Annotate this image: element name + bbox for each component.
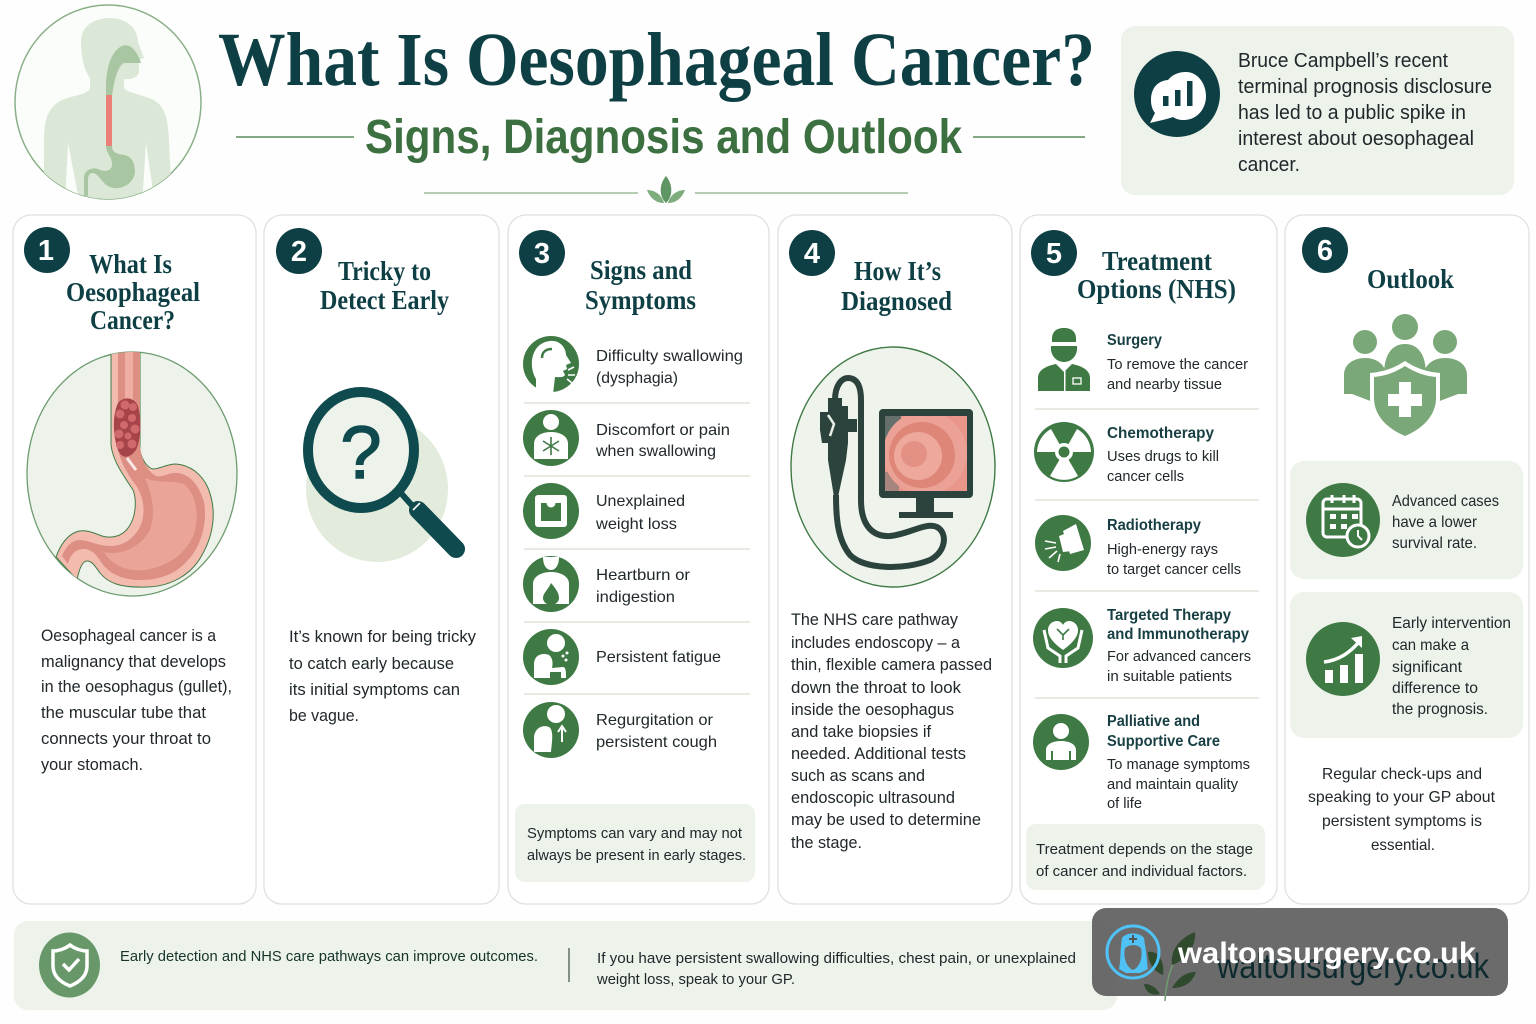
text: regular check-ups: Regular check-ups and bbox=[1322, 766, 1482, 783]
text: regular check-ups: essential. bbox=[1371, 837, 1435, 854]
footer message: Early detection and NHS care pathways can improve outcomes. bbox=[120, 948, 538, 965]
panel 4: how it's diagnosed bbox=[778, 215, 1012, 904]
treatment: surgery: To remove the cancer bbox=[1107, 356, 1248, 373]
heading 6: Outlook bbox=[1367, 264, 1454, 294]
note: treatment depends bbox=[1026, 824, 1265, 890]
icon: calendar bbox=[1306, 483, 1380, 557]
badge 5: 5 bbox=[1046, 238, 1062, 270]
note: treatment depends: Treatment depends on the stage bbox=[1036, 841, 1253, 858]
callout: advanced cases: survival rate. bbox=[1392, 535, 1477, 552]
treatment: surgery bbox=[1038, 328, 1248, 393]
treatment: surgery: Surgery bbox=[1107, 332, 1162, 349]
icon: leaf divider bbox=[424, 176, 908, 203]
treatment: chemotherapy: Chemotherapy bbox=[1107, 425, 1214, 442]
treatment: palliative care: and maintain quality bbox=[1107, 776, 1238, 793]
illustration: endoscope and monitor bbox=[791, 347, 995, 587]
heading 3: Symptoms bbox=[585, 285, 696, 315]
body text 4: includes endoscopy – a bbox=[791, 633, 961, 652]
body text 2 bbox=[289, 627, 476, 725]
badge 3: 3 bbox=[534, 238, 550, 270]
treatment: palliative care: Supportive Care bbox=[1107, 733, 1220, 750]
symptom: discomfort: Discomfort or pain bbox=[596, 422, 730, 439]
symptom: weight loss: weight loss bbox=[595, 516, 677, 533]
icon: chart speech bubble bbox=[1134, 51, 1220, 137]
heading 2: Detect Early bbox=[320, 285, 449, 315]
text: regular check-ups: persistent symptoms is bbox=[1322, 813, 1482, 830]
footer advice: weight loss, speak to your GP. bbox=[596, 971, 795, 988]
icon: magnifying glass bbox=[306, 392, 456, 562]
body text 4 bbox=[791, 610, 992, 852]
footer advice: If you have persistent swallowing difficulties, chest pain, or unexplained bbox=[597, 950, 1076, 967]
callout: advanced cases: have a lower bbox=[1392, 514, 1478, 531]
icon: anatomy medallion bbox=[15, 5, 201, 205]
symptom: fatigue bbox=[523, 629, 721, 685]
treatment: targeted therapy: and Immunotherapy bbox=[1107, 626, 1249, 643]
callout: early intervention: the prognosis. bbox=[1392, 701, 1488, 718]
badge 1 bbox=[24, 227, 70, 273]
heading 1: Oesophageal bbox=[66, 277, 200, 307]
heading 1 bbox=[66, 249, 200, 335]
note: symptoms vary: Symptoms can vary and may not bbox=[527, 825, 743, 842]
symptom: difficulty swallowing: (dysphagia) bbox=[596, 370, 678, 387]
symptom: heartburn bbox=[523, 556, 691, 612]
watermark url (white): waltonsurgery.co.uk bbox=[1177, 937, 1476, 970]
panel: context bbox=[1121, 26, 1514, 195]
body text 1: Oesophageal cancer is a bbox=[41, 626, 217, 645]
treatment: chemotherapy bbox=[1034, 422, 1219, 485]
body text 4: such as scans and bbox=[791, 766, 925, 785]
symptom: difficulty swallowing: Difficulty swallowing bbox=[596, 348, 743, 365]
subtitle: Signs, Diagnosis and Outlook bbox=[365, 111, 962, 164]
callout: early intervention: difference to bbox=[1392, 680, 1478, 697]
badge 4: 4 bbox=[804, 238, 820, 270]
callout: advanced cases: Advanced cases bbox=[1392, 493, 1499, 510]
callout: early intervention: significant bbox=[1392, 659, 1463, 676]
note: treatment depends: of cancer and individual factors. bbox=[1036, 863, 1247, 880]
body text 4: thin, flexible camera passed bbox=[791, 655, 992, 674]
treatment: palliative care: To manage symptoms bbox=[1107, 756, 1250, 773]
callout: early intervention bbox=[1290, 592, 1523, 738]
heading 4: How It’s bbox=[854, 256, 941, 286]
callout: early intervention: Early intervention bbox=[1392, 615, 1511, 632]
symptom: heartburn: indigestion bbox=[596, 589, 675, 606]
treatment: surgery: and nearby tissue bbox=[1107, 376, 1222, 393]
symptom: regurgitation: persistent cough bbox=[596, 734, 717, 751]
body text 1: connects your throat to bbox=[41, 729, 211, 748]
treatment: palliative care bbox=[1033, 713, 1250, 812]
badge 6 bbox=[1302, 227, 1348, 273]
icon: leaf sprig bbox=[1144, 932, 1196, 1001]
illustration: stomach bbox=[27, 352, 237, 596]
body text 4: inside the oesophagus bbox=[791, 700, 954, 719]
heading 1: What Is bbox=[89, 249, 172, 279]
watermark bbox=[1092, 908, 1508, 1001]
text: regular check-ups: speaking to your GP about bbox=[1308, 789, 1496, 806]
treatment: targeted therapy: For advanced cancers bbox=[1107, 648, 1251, 665]
body text 2: be vague. bbox=[289, 706, 359, 725]
symptom: heartburn: Heartburn or bbox=[596, 567, 691, 584]
symptom: regurgitation bbox=[523, 702, 717, 758]
context text: Bruce Campbell’s recent bbox=[1238, 50, 1448, 72]
icon: people with shield bbox=[1344, 314, 1467, 441]
body text 4: endoscopic ultrasound bbox=[791, 788, 955, 807]
heading 4: Diagnosed bbox=[841, 286, 952, 316]
body text 2: to catch early because bbox=[289, 654, 454, 673]
body text 4: and take biopsies if bbox=[791, 722, 931, 741]
badge 4 bbox=[789, 230, 835, 276]
symptom: discomfort: when swallowing bbox=[595, 443, 716, 460]
treatment: palliative care: Palliative and bbox=[1107, 713, 1200, 730]
callout: early intervention: can make a bbox=[1392, 637, 1469, 654]
context text: interest about oesophageal bbox=[1238, 128, 1474, 150]
badge 1: 1 bbox=[38, 235, 54, 267]
footer banner bbox=[14, 921, 1117, 1010]
treatment: chemotherapy: Uses drugs to kill bbox=[1107, 448, 1219, 465]
tumour bbox=[114, 398, 140, 470]
note: symptoms vary: always be present in early stages. bbox=[527, 847, 746, 864]
footer advice bbox=[596, 950, 1076, 988]
body text 4: down the throat to look bbox=[791, 678, 961, 697]
body text 1: malignancy that develops bbox=[41, 652, 226, 671]
context text: cancer. bbox=[1238, 154, 1300, 176]
heading 3 bbox=[585, 255, 696, 315]
treatment: targeted therapy: in suitable patients bbox=[1107, 668, 1232, 685]
treatment: chemotherapy: cancer cells bbox=[1107, 468, 1184, 485]
symptom: weight loss: Unexplained bbox=[596, 493, 685, 510]
heading 2 bbox=[320, 256, 449, 315]
panel 1: what is it bbox=[13, 215, 256, 904]
body text 4: may be used to determine bbox=[791, 810, 981, 829]
heading 2: Tricky to bbox=[338, 256, 431, 286]
body text 2: It’s known for being tricky bbox=[289, 627, 476, 646]
watermark url (dark): waltonsurgery.co.uk bbox=[1216, 947, 1489, 986]
note: symptoms vary bbox=[515, 804, 755, 882]
badge 2: 2 bbox=[291, 236, 307, 268]
treatment: radiotherapy: to target cancer cells bbox=[1107, 561, 1241, 578]
context text bbox=[1238, 50, 1492, 176]
symptom: difficulty swallowing bbox=[523, 336, 743, 394]
body text 2: its initial symptoms can bbox=[289, 680, 460, 699]
panel 5: treatment options bbox=[1020, 215, 1277, 904]
body text 4: the stage. bbox=[791, 833, 862, 852]
symptom: weight loss bbox=[523, 483, 685, 539]
badge 3 bbox=[519, 230, 565, 276]
badge 6: 6 bbox=[1317, 235, 1333, 267]
panel 2: tricky to detect bbox=[264, 215, 499, 904]
icon: shield check bbox=[39, 932, 100, 998]
context text: has led to a public spike in bbox=[1238, 102, 1466, 124]
icon: magnifying glass: ? bbox=[340, 411, 382, 494]
badge 5 bbox=[1031, 230, 1077, 276]
heading 5: Treatment bbox=[1102, 246, 1212, 276]
callout: advanced cases bbox=[1290, 461, 1523, 579]
treatment: targeted therapy bbox=[1033, 607, 1251, 685]
symptom: discomfort bbox=[523, 410, 730, 466]
heading 5: Options (NHS) bbox=[1077, 274, 1236, 304]
treatment: radiotherapy: Radiotherapy bbox=[1107, 517, 1201, 534]
body text 1: in the oesophagus (gullet), bbox=[41, 677, 232, 696]
treatment: targeted therapy: Targeted Therapy bbox=[1107, 607, 1231, 624]
heading 4 bbox=[841, 256, 952, 316]
icon: nurse logo bbox=[1107, 926, 1159, 978]
treatment: radiotherapy: High-energy rays bbox=[1107, 541, 1218, 558]
treatment: palliative care: of life bbox=[1107, 795, 1142, 812]
body text 1: the muscular tube that bbox=[41, 703, 206, 722]
badge 2 bbox=[276, 228, 322, 274]
body text 1: your stomach. bbox=[41, 755, 143, 774]
context text: terminal prognosis disclosure bbox=[1238, 76, 1492, 98]
heading 3: Signs and bbox=[590, 255, 692, 285]
symptom: fatigue: Persistent fatigue bbox=[596, 649, 721, 666]
heading 1: Cancer? bbox=[90, 305, 175, 335]
title: What Is Oesophageal Cancer? bbox=[218, 18, 1095, 102]
heading 5 bbox=[1077, 246, 1236, 304]
panel 3: signs and symptoms bbox=[508, 215, 769, 904]
symptom: regurgitation: Regurgitation or bbox=[596, 712, 714, 729]
body text 4: needed. Additional tests bbox=[791, 744, 966, 763]
panel 6: outlook bbox=[1285, 215, 1529, 904]
text: regular check-ups bbox=[1308, 766, 1496, 854]
treatment: radiotherapy bbox=[1035, 515, 1241, 578]
icon: growth chart bbox=[1306, 622, 1380, 696]
body text 4: The NHS care pathway bbox=[791, 610, 958, 629]
body text 1 bbox=[41, 626, 232, 774]
